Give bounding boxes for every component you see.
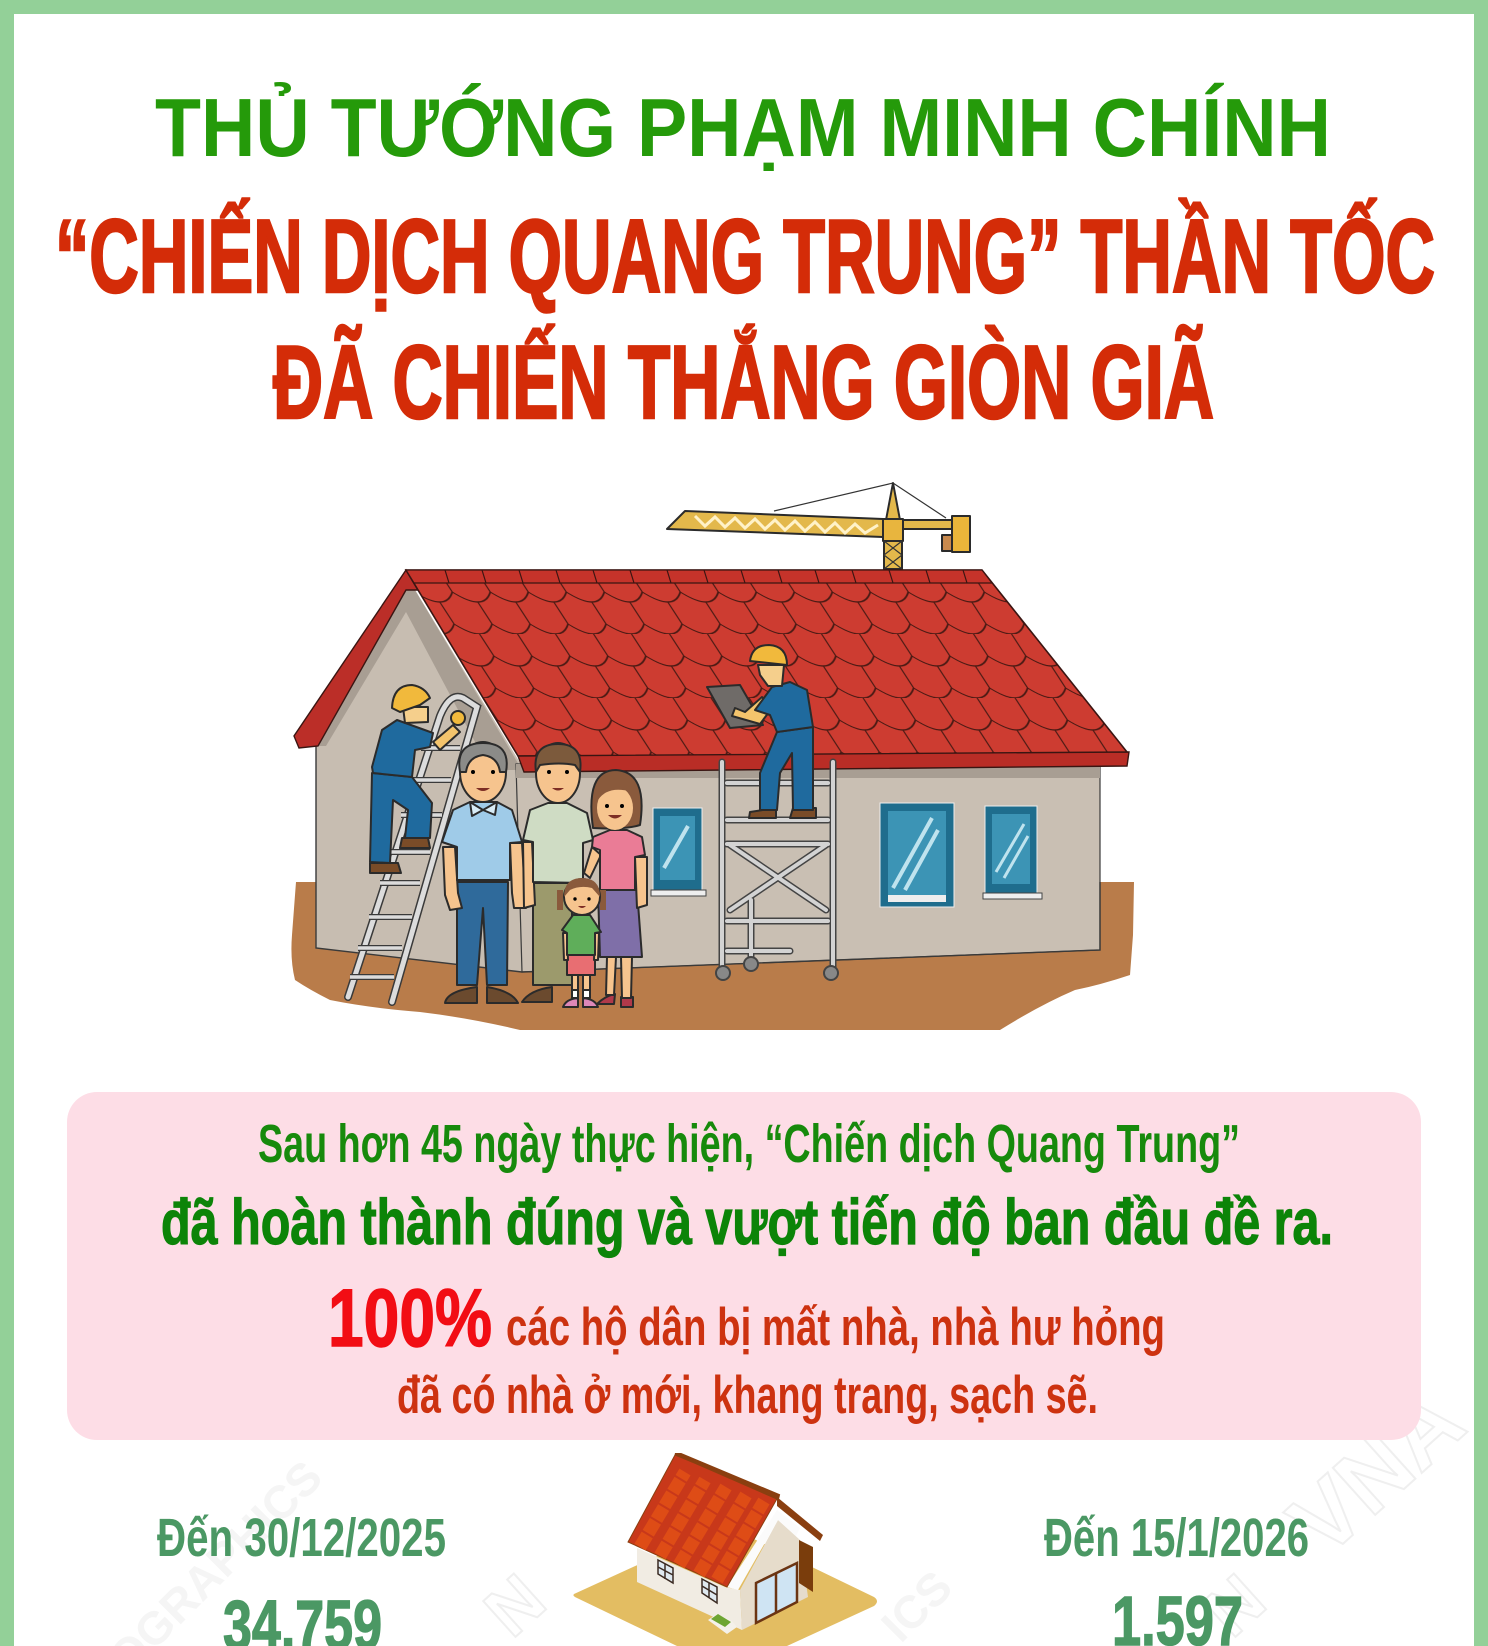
roof tiles bbox=[406, 570, 1127, 756]
left gable wall bbox=[316, 575, 522, 972]
roof ridge bbox=[675, 1454, 779, 1499]
family bbox=[442, 742, 647, 1007]
stat: by 30/12/2025 bbox=[157, 1508, 446, 1646]
crane bbox=[667, 483, 970, 569]
worker on roof bbox=[707, 645, 816, 818]
planter bbox=[708, 1614, 737, 1634]
eave tiles bbox=[777, 1497, 823, 1541]
base bbox=[573, 1525, 877, 1646]
right wall bbox=[516, 764, 1100, 972]
grandfather bbox=[442, 742, 526, 1003]
ground bbox=[291, 882, 1134, 1030]
ladder bbox=[348, 697, 477, 1002]
date label: Đến 15/1/2026 bbox=[1044, 1508, 1309, 1568]
date label: Đến 30/12/2025 bbox=[157, 1508, 446, 1568]
gable wall bbox=[740, 1520, 808, 1630]
roof tile rows bbox=[640, 1472, 764, 1580]
watermarks: VNA bbox=[1270, 1369, 1483, 1575]
percentage: 100% bbox=[328, 1273, 492, 1364]
window 2 bbox=[880, 803, 954, 907]
house illustration bbox=[291, 483, 1134, 1030]
roof bbox=[628, 1455, 778, 1587]
stat: by 15/1/2026 bbox=[1044, 1508, 1309, 1646]
title bbox=[55, 81, 1435, 441]
worker on ladder bbox=[370, 685, 465, 873]
icon: small house bbox=[573, 1454, 877, 1646]
watermarks bbox=[98, 1369, 1483, 1646]
left wall bbox=[637, 1548, 742, 1630]
title line 1: THỦ TƯỚNG PHẠM MINH CHÍNH bbox=[155, 81, 1331, 174]
windows bbox=[658, 1560, 717, 1603]
door panel bbox=[799, 1540, 813, 1592]
gable trim bbox=[727, 1510, 800, 1590]
glass door bbox=[756, 1563, 797, 1623]
gable fascia bbox=[294, 570, 418, 748]
mother bbox=[584, 770, 647, 1007]
daughter bbox=[557, 878, 606, 1007]
gutter bbox=[518, 752, 1129, 772]
result line 2: đã có nhà ở mới, khang trang, sạch sẽ. bbox=[397, 1366, 1098, 1425]
window 3 bbox=[983, 806, 1042, 899]
result line 1: các hộ dân bị mất nhà, nhà hư hỏng bbox=[506, 1298, 1165, 1357]
scaffold bbox=[716, 762, 838, 980]
panel background bbox=[67, 1092, 1421, 1440]
roof ridge bbox=[406, 570, 992, 583]
window 1 bbox=[651, 808, 706, 896]
info panel bbox=[67, 1092, 1421, 1440]
father bbox=[522, 743, 593, 1002]
